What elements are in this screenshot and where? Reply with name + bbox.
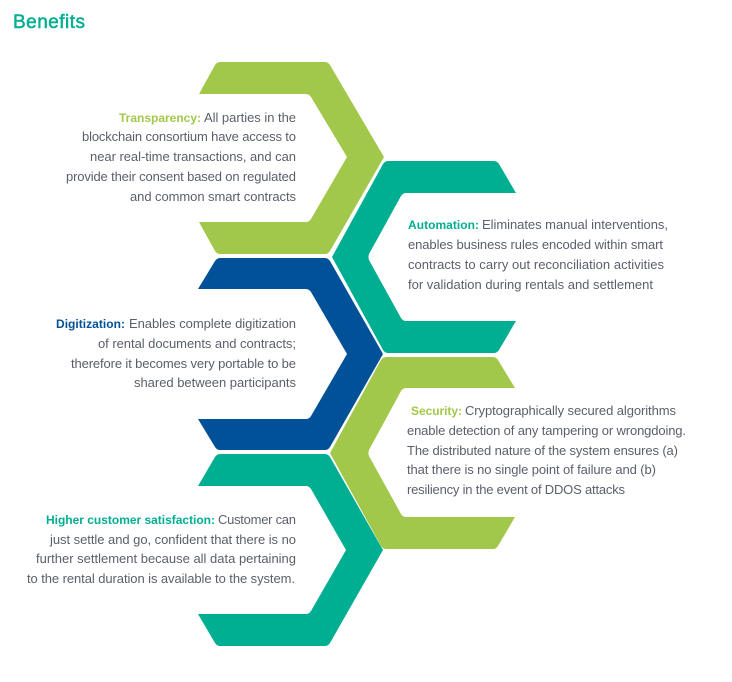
hexagon: security bbox=[330, 357, 515, 549]
text block: security: The distributed nature of the system ensures (a) bbox=[407, 443, 678, 458]
hexagon: transparency bbox=[199, 62, 384, 254]
text block: automation: Eliminates manual interventions, bbox=[482, 217, 668, 232]
text block: higher customer satisfaction: Customer can bbox=[218, 512, 296, 527]
text block: automation bbox=[408, 217, 668, 292]
text block: automation: for validation during rentals and settlement bbox=[408, 277, 653, 292]
text block: security bbox=[407, 403, 686, 497]
text block: automation: Automation: bbox=[408, 218, 479, 232]
title: Benefits bbox=[13, 12, 85, 33]
text block: digitization: shared between participants bbox=[134, 375, 296, 390]
text block: transparency: Transparency: bbox=[119, 111, 201, 125]
hexagon: customer satisfaction bbox=[198, 454, 383, 646]
text block: transparency: and common smart contracts bbox=[130, 189, 296, 204]
text block: automation: contracts to carry out reconciliation activities bbox=[408, 257, 664, 272]
text block: security: Cryptographically secured algorithms bbox=[465, 403, 676, 418]
text block: higher customer satisfaction: further settlement because all data pertaining bbox=[36, 551, 296, 566]
text block: digitization: Digitization: bbox=[56, 317, 125, 331]
text block: digitization: of rental documents and contracts; bbox=[98, 336, 296, 351]
text block: higher customer satisfaction bbox=[27, 512, 296, 586]
text block: digitization bbox=[56, 316, 296, 390]
text block: security: Security: bbox=[411, 404, 462, 418]
text block: digitization: Enables complete digitization bbox=[129, 316, 296, 331]
text block: higher customer satisfaction: Higher customer satisfaction: bbox=[46, 513, 215, 527]
text block: digitization: therefore it becomes very portable to be bbox=[71, 356, 296, 371]
text block: security: that there is no single point of failure and (b) bbox=[407, 462, 656, 477]
text block: transparency: near real-time transactions, and can bbox=[90, 149, 296, 164]
text block: higher customer satisfaction: to the rental duration is available to the system. bbox=[27, 571, 295, 586]
text block: security: resiliency in the event of DDOS attacks bbox=[407, 482, 626, 497]
hexagon: digitization bbox=[198, 258, 383, 450]
text block: transparency: blockchain consortium have access to bbox=[82, 129, 296, 144]
text block: transparency bbox=[66, 110, 296, 204]
text block: security: enable detection of any tampering or wrongdoing. bbox=[407, 423, 686, 438]
text block: transparency: All parties in the bbox=[204, 110, 296, 125]
text block: transparency: provide their consent based on regulated bbox=[66, 169, 296, 184]
text block: automation: enables business rules encoded within smart bbox=[408, 237, 663, 252]
hexagon: automation bbox=[332, 161, 516, 353]
text block: higher customer satisfaction: just settle and go, confident that there is no bbox=[49, 532, 296, 547]
